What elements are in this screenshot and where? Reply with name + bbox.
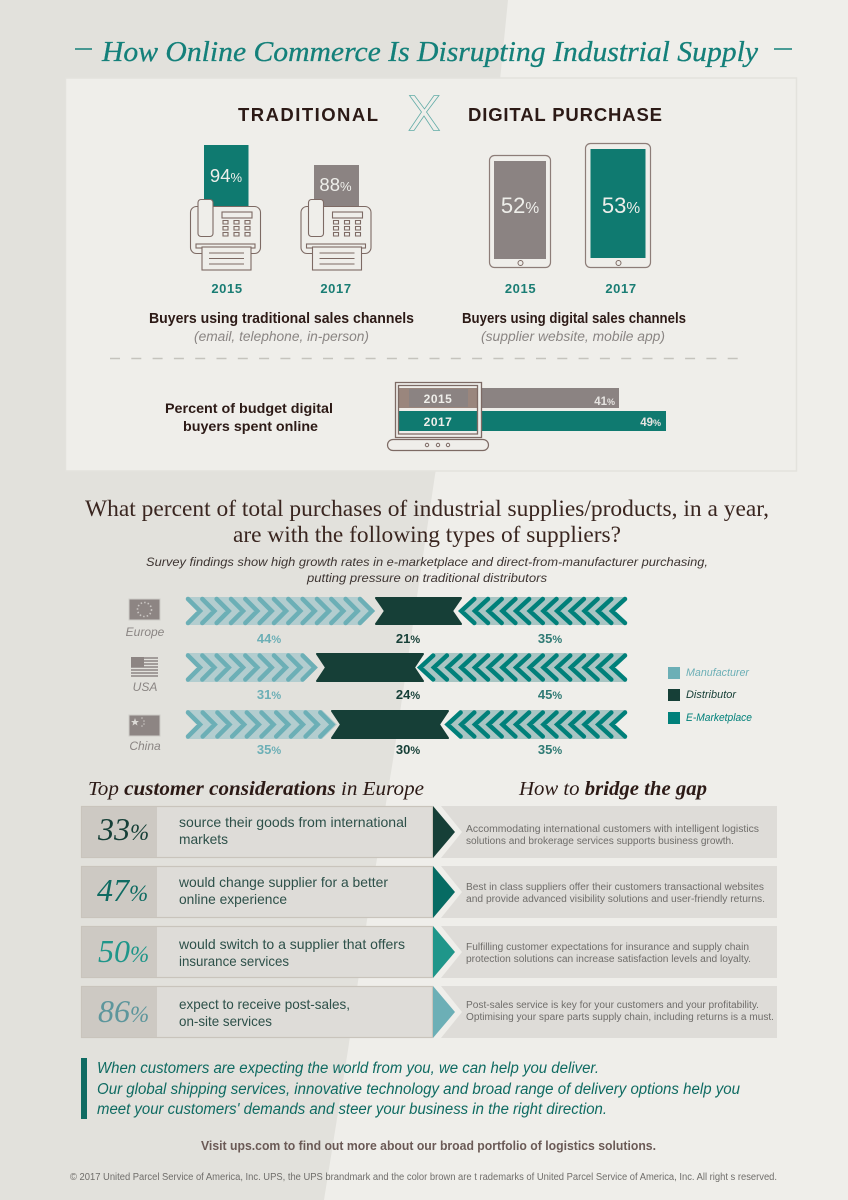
chart row: Europe [126, 597, 627, 646]
chart row: USA: 31% [257, 687, 281, 702]
row: 47% online experience: would change supplier for a better [178, 874, 388, 890]
heading: traditional: TRADITIONAL [238, 104, 378, 125]
chart row: USA: USA [133, 680, 157, 694]
laptop bar chart: 2015 [424, 392, 452, 406]
caption: traditional channels: (email, telephone, in-person) [194, 329, 369, 344]
row: 33% international: Accommodating international customers with intelligent logistics [466, 824, 759, 835]
chart row: China: 35% [257, 742, 281, 757]
title: How Online Commerce Is Disrupting Industrial Supply [101, 36, 758, 68]
survey question heading [85, 496, 769, 547]
row: 33% international: solutions and brokerage services supports business growth. [466, 836, 734, 847]
legend [668, 667, 752, 724]
caption: percent of budget [165, 400, 333, 434]
icon: China flag [129, 715, 160, 736]
row: 33% international: source their goods from international [179, 814, 407, 830]
row: 50% insurance: would switch to a supplier that offers [178, 936, 405, 952]
laptop bar chart: 49% [640, 417, 661, 429]
survey subheading: putting pressure on traditional distributors [306, 571, 547, 585]
caption: traditional channels [149, 311, 414, 344]
row: 33% international: markets [179, 831, 228, 847]
chart row: China: 35% [538, 742, 562, 757]
caption: digital channels [462, 311, 686, 344]
laptop bar chart: 2017 [424, 415, 452, 429]
call to action: Visit ups.com to find out more about our broad portfolio of logistics solutions. [201, 1139, 656, 1153]
laptop base [388, 440, 488, 450]
chart row: Europe: 35% [538, 631, 562, 646]
chart row: USA: 24% [396, 687, 420, 702]
laptop bar chart [388, 382, 666, 450]
caption: digital channels: Buyers using digital sales channels [462, 311, 686, 327]
row: 47% online experience [82, 866, 777, 918]
row: 47% online experience: online experience [179, 891, 287, 907]
row: 47% online experience: Best in class suppliers offer their customers transactional websites [466, 882, 764, 893]
heading: top customer considerations: Top customer considerations in Europe [88, 778, 424, 800]
row: 33% international: 33% [97, 811, 149, 847]
callout: closing message: Our global shipping services, innovative technology and broad range of delivery options help you [97, 1081, 740, 1098]
survey subheading [146, 555, 708, 585]
caption: percent of budget: Percent of budget digital [165, 400, 333, 416]
phone chart: digital 2017: 53% [602, 193, 640, 218]
fax chart: traditional 2017 [301, 165, 371, 270]
phone chart: digital 2017 [586, 144, 650, 268]
row: 50% insurance [82, 926, 777, 978]
chart row: Europe: 44% [257, 631, 281, 646]
phone chart: digital 2015 [490, 156, 550, 268]
row: 86% post-sales: on-site services [179, 1013, 272, 1029]
legend: Distributor [686, 689, 737, 701]
row: 86% post-sales: Post-sales service is key for your customers and your profitability. [466, 1000, 759, 1011]
row: 47% online experience: 47% [97, 872, 148, 908]
chart row: Europe: Europe [126, 625, 165, 639]
copyright: © 2017 United Parcel Service of America, Inc. UPS, the UPS brandmark and the color brown are t rademarks of United Parcel Service of America, Inc. All right s reserved. [70, 1172, 777, 1183]
chart row: China: China [129, 739, 161, 753]
row: 86% post-sales: expect to receive post-sales, [179, 996, 350, 1012]
phone chart: digital 2015: 52% [501, 193, 539, 218]
fax chart: traditional 2015: 94% [210, 165, 243, 186]
survey question heading: are with the following types of suppliers? [233, 522, 621, 547]
row: 50% insurance: insurance services [179, 953, 289, 969]
year labels: 2015 [211, 281, 243, 296]
row: 50% insurance: protection solutions can increase satisfaction levels and loyalty. [466, 954, 751, 965]
icon: USA flag [131, 657, 158, 677]
row: 50% insurance: 50% [98, 933, 149, 969]
row: 86% post-sales: 86% [98, 993, 149, 1029]
chart row: China [129, 710, 627, 757]
callout: closing message: When customers are expecting the world from you, we can help you deliver. [97, 1060, 599, 1077]
legend: E-Marketplace [686, 712, 752, 724]
chart row: China: 30% [396, 742, 420, 757]
laptop bar chart: 41% [594, 396, 615, 408]
icon: outlined X [409, 96, 440, 130]
chart row: USA: 45% [538, 687, 562, 702]
year labels: 2017 [320, 281, 352, 296]
year labels: 2017 [605, 281, 637, 296]
heading: how to bridge the gap: How to bridge the gap [518, 778, 707, 800]
caption: traditional channels: Buyers using traditional sales channels [149, 311, 414, 327]
row: 50% insurance: Fulfilling customer expectations for insurance and supply chain [466, 942, 749, 953]
year labels [211, 281, 637, 296]
legend: Manufacturer [686, 667, 750, 679]
row: 86% post-sales [82, 986, 777, 1038]
callout: closing message [81, 1058, 740, 1119]
row: 33% international [82, 806, 777, 858]
icon: EU flag [129, 599, 160, 620]
year labels: 2015 [505, 281, 536, 296]
chart row: Europe: 21% [396, 631, 420, 646]
caption: percent of budget: buyers spent online [183, 418, 318, 434]
row: 47% online experience: and provide advanced visibility solutions and user-friendly returns. [466, 894, 765, 905]
survey question heading: What percent of total purchases of industrial supplies/products, in a year, [85, 496, 769, 521]
callout: closing message: meet your customers' demands and steer your business in the right direction. [97, 1101, 607, 1118]
panel: traditional vs digital purchase [66, 78, 796, 471]
row: 86% post-sales: Optimising your spare parts supply chain, including returns is a must. [466, 1012, 774, 1023]
fax chart: traditional 2017: 88% [319, 174, 352, 195]
heading: digital purchase: DIGITAL PURCHASE [468, 104, 662, 125]
fax chart: traditional 2015 [190, 145, 260, 270]
laptop frame [396, 382, 482, 438]
caption: digital channels: (supplier website, mobile app) [481, 329, 665, 344]
survey subheading: Survey findings show high growth rates in e-marketplace and direct-from-manufacturer purchasing, [146, 555, 708, 569]
chart row: USA [131, 653, 627, 702]
